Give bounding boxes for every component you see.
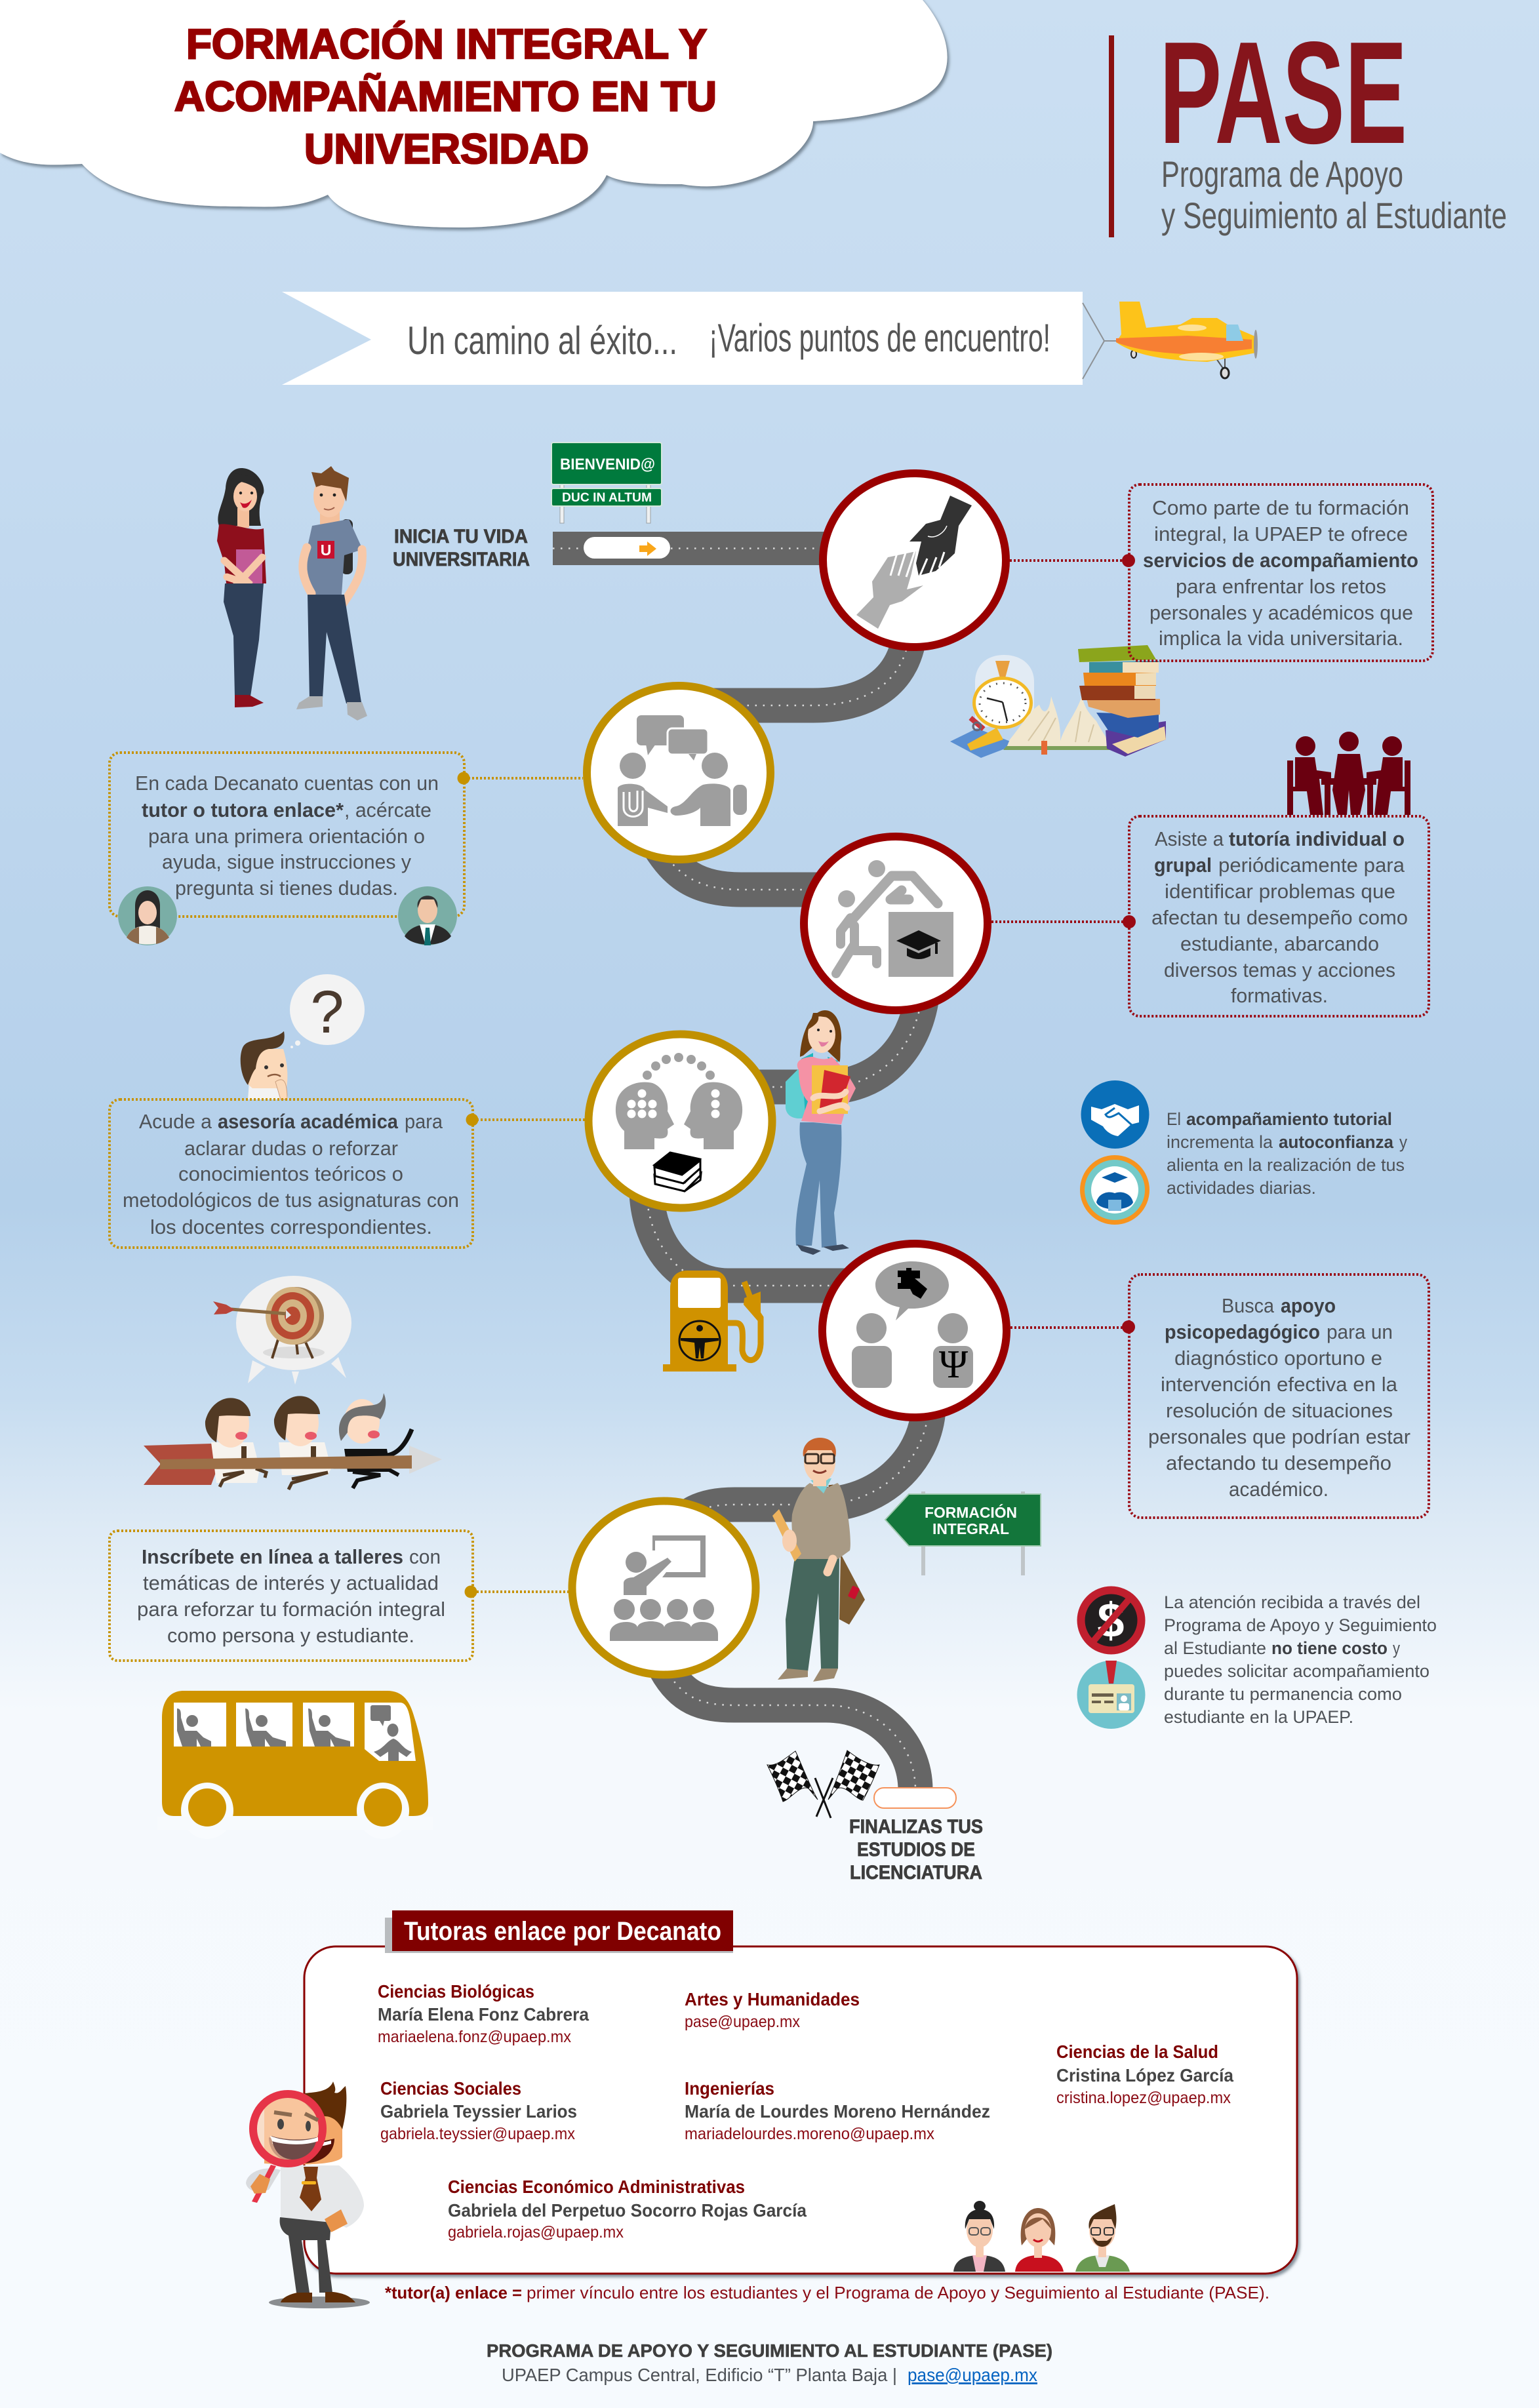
contact: ciencias biologicas: mariaelena.fonz@upaep.mx (378, 2028, 571, 2046)
illustration: male student with bag (772, 1438, 865, 1682)
heading: finalizas tus estudios: FINALIZAS TUS (849, 1816, 983, 1838)
person 3 (339, 1393, 412, 1488)
PASE logo (1109, 12, 1507, 237)
footer (487, 2340, 1052, 2385)
panel: apoyo psicopedagogico (1010, 1274, 1429, 1518)
heading: finalizas tus estudios (849, 1816, 983, 1884)
panel: apoyo psicopedagogico: diagnóstico oportuno e (1174, 1347, 1382, 1370)
person 2 (274, 1396, 331, 1490)
panel: tutoria individual o grupal: grupal (1154, 854, 1212, 877)
contact: ciencias biologicas: Ciencias Biológicas (378, 1981, 534, 2002)
icon: graduate (1080, 1155, 1149, 1225)
thought bubble: ? (310, 979, 344, 1046)
panel: apoyo psicopedagogico: afectando tu desempeño (1166, 1451, 1391, 1474)
icon: two people with psi: Ψ (939, 1343, 969, 1386)
panel: tutoria individual o grupal: formativas. (1231, 984, 1328, 1007)
footnote: *tutor(a) enlace = (385, 2283, 522, 2302)
contact: ingenierias: Ingenierías (685, 2078, 774, 2099)
footnote: primer vínculo entre los estudiantes y el Programa de Apoyo y Seguimiento al Estudiante (PASE). (527, 2283, 1269, 2302)
panel: tutor o tutora enlace: En cada Decanato cuentas con un (135, 772, 439, 795)
icon: teacher and audience (610, 1535, 718, 1641)
panel: servicios de acompañamiento: personales y académicos que (1149, 601, 1413, 624)
icon: no dollar: $ (1097, 1593, 1125, 1648)
panel: asesoria academica: aclarar dudas o reforzar (184, 1137, 398, 1160)
title (174, 20, 717, 172)
contact: ciencias sociales (380, 2078, 577, 2143)
icon: two people talking (618, 715, 747, 826)
cloud with title (0, 0, 948, 227)
panel: tutor o tutora enlace: tutor o tutora enlace* (142, 799, 344, 821)
book and hand (772, 1509, 801, 1562)
PASE logo: PASE (1159, 12, 1407, 174)
icon: handshake (1081, 1080, 1149, 1149)
panel: talleres (110, 1531, 569, 1661)
panel: apoyo psicopedagogico: académico. (1229, 1478, 1329, 1501)
icon: dark hand (909, 496, 972, 577)
side note: no tiene costo: no tiene costo (1271, 1638, 1388, 1658)
panel: asesoria academica: conocimientos teóricos o (178, 1162, 403, 1185)
illustration: thinking student (241, 974, 365, 1099)
legs (786, 1557, 839, 1672)
panel: tutor o tutora enlace: ayuda, sigue instrucciones y (162, 850, 411, 873)
side note: acompañamiento tutorial (1080, 1080, 1407, 1225)
illustration: three tutors (953, 2201, 1130, 2272)
side note: no tiene costo: y (1393, 1638, 1400, 1658)
arrow tail and head (144, 1444, 442, 1485)
illustration: target speech bubble (213, 1276, 351, 1385)
panel: servicios de acompañamiento: integral, la UPAEP te ofrece (1154, 523, 1408, 545)
footer: PROGRAMA DE APOYO Y SEGUIMIENTO AL ESTUDIANTE (PASE) (487, 2340, 1052, 2361)
arms and shirt (281, 2165, 364, 2228)
contact: ingenierias: mariadelourdes.moreno@upaep.mx (685, 2125, 934, 2143)
panel: tutoria individual o grupal (991, 816, 1429, 1016)
panel: talleres: con (409, 1545, 441, 1568)
icon: figures climbing to graduation (836, 860, 953, 977)
banner (282, 292, 1083, 385)
panel: tutoria individual o grupal: identificar problemas que (1165, 880, 1395, 903)
contact: ciencias de la salud (1056, 2042, 1233, 2107)
icon: airplane (1083, 302, 1258, 379)
sign: bienvenid@ (551, 443, 662, 523)
heading: inicia tu vida universitaria: INICIA TU VIDA (394, 526, 528, 547)
pants and shoes (280, 2217, 332, 2293)
banner: Un camino al éxito... (407, 319, 677, 363)
footer: pase@upaep.mx (908, 2365, 1037, 2385)
panel: apoyo psicopedagogico: Busca (1222, 1294, 1275, 1317)
tutor 2 (1015, 2208, 1064, 2272)
panel: asesoria academica: metodológicos de tus asignaturas con (123, 1189, 459, 1212)
side note: no tiene costo (1077, 1587, 1437, 1729)
panel: asesoria academica: los docentes correspondientes. (150, 1215, 432, 1238)
panel: talleres: para reforzar tu formación integral (137, 1598, 445, 1621)
person 1 (205, 1398, 266, 1487)
panel: tutor o tutora enlace (110, 753, 583, 945)
panel: tutor o tutora enlace: pregunta si tienes dudas. (175, 877, 398, 899)
panel: asesoria academica: para (405, 1110, 443, 1133)
circle 5: psychopedagogy (822, 1244, 1007, 1417)
sign: bienvenid@: BIENVENID@ (560, 456, 655, 473)
contact: ingenierias (685, 2078, 990, 2143)
panel: tutor o tutora enlace: para una primera orientación o (148, 825, 425, 848)
male student (296, 466, 367, 720)
bag (839, 1554, 865, 1625)
header tab (385, 1910, 733, 1953)
side note: acompañamiento tutorial: acompañamiento tutorial (1186, 1109, 1392, 1129)
title: ACOMPAÑAMIENTO EN TU (174, 73, 717, 120)
side note: no tiene costo: estudiante en la UPAEP. (1164, 1707, 1353, 1727)
contact: ciencias de la salud: Ciencias de la Salud (1056, 2042, 1218, 2062)
panel: apoyo psicopedagogico: psicopedagógico (1165, 1320, 1320, 1343)
panel: tutoria individual o grupal: Asiste a (1155, 827, 1224, 850)
panel: servicios de acompañamiento: servicios de acompañamiento (1143, 549, 1418, 572)
avatar: female tutor (118, 886, 177, 945)
heading: inicia tu vida universitaria (393, 526, 530, 570)
icon: speech bubble with puzzle (875, 1261, 949, 1320)
sweater (791, 1483, 850, 1559)
panel: apoyo psicopedagogico: apoyo (1281, 1294, 1336, 1317)
female student (217, 468, 266, 707)
avatar: male tutor (398, 886, 457, 945)
side note: no tiene costo: durante tu permanencia como (1164, 1684, 1402, 1704)
contact: ingenierias: María de Lourdes Moreno Hernández (685, 2101, 990, 2122)
side note: acompañamiento tutorial: El (1167, 1109, 1181, 1129)
icon: checkered flags (767, 1750, 879, 1818)
side note: acompañamiento tutorial: alienta en la realización de tus (1167, 1155, 1405, 1175)
clock under dome (972, 655, 1034, 729)
contact: ciencias de la salud: cristina.lopez@upaep.mx (1056, 2089, 1231, 2107)
contact: ciencias economico administrativas (448, 2177, 807, 2241)
panel: apoyo psicopedagogico: personales que podrían estar (1148, 1425, 1410, 1448)
contact: ciencias de la salud: Cristina López García (1056, 2065, 1233, 2085)
sign: bienvenid@: DUC IN ALTUM (562, 491, 652, 505)
panel: tutoria individual o grupal: diversos temas y acciones (1164, 958, 1395, 981)
book stack (1078, 645, 1166, 757)
emblem (679, 1321, 720, 1360)
panel: talleres: temáticas de interés y actualidad (143, 1571, 439, 1594)
illustration: books and clock (950, 645, 1166, 758)
panel: tutoria individual o grupal: estudiante, abarcando (1180, 932, 1379, 955)
panel: servicios de acompañamiento: para enfrentar los retos (1176, 575, 1386, 598)
panel: tutor o tutora enlace: , acércate (344, 799, 431, 821)
side note: acompañamiento tutorial: y (1399, 1132, 1407, 1152)
sign: formacion integral: FORMACIÓN (925, 1503, 1017, 1521)
icon: stack of books (654, 1153, 701, 1191)
thought bubble (290, 974, 365, 1048)
contact: artes y humanidades: pase@upaep.mx (685, 2013, 800, 2031)
male student: U (321, 542, 331, 559)
contact: ciencias biologicas: María Elena Fonz Cabrera (378, 2004, 589, 2024)
panel: tutoras enlace por decanato (304, 1910, 1297, 2274)
side note: no tiene costo: puedes solicitar acompañamiento (1164, 1661, 1429, 1681)
panel: tutoria individual o grupal: periódicamente para (1218, 854, 1405, 877)
title: FORMACIÓN INTEGRAL Y (186, 20, 707, 68)
side note: acompañamiento tutorial: autoconfianza (1279, 1132, 1394, 1152)
panel: asesoria academica: asesoría académica (218, 1110, 399, 1133)
banner: ¡Varios puntos de encuentro! (709, 316, 1050, 360)
illustration: two students (217, 466, 367, 720)
heading: inicia tu vida universitaria: UNIVERSITARIA (393, 549, 530, 570)
tutor 1 (953, 2201, 1005, 2272)
illustration: bus (157, 1691, 433, 1839)
contact: ciencias sociales: Gabriela Teyssier Larios (380, 2101, 577, 2122)
header tab: Tutoras enlace por Decanato (404, 1917, 721, 1946)
circle 4: academic advice (589, 1035, 772, 1208)
panel: talleres: Inscríbete en línea a talleres (142, 1545, 403, 1568)
tools on notebook (950, 718, 1017, 758)
panel: talleres: como persona y estudiante. (167, 1624, 414, 1647)
side note: no tiene costo: La atención recibida a través del (1164, 1592, 1420, 1612)
panel: servicios de acompañamiento: Como parte de tu formación (1152, 496, 1409, 519)
heading: finalizas tus estudios: ESTUDIOS DE (857, 1839, 975, 1861)
icon: gas pump (663, 1271, 761, 1372)
panel: asesoria academica (110, 1099, 585, 1248)
sign: formacion integral (885, 1491, 1041, 1575)
icon: no dollar (1077, 1587, 1145, 1655)
icon: two people with psi (852, 1313, 973, 1388)
side note: acompañamiento tutorial: incrementa la (1167, 1132, 1273, 1152)
panel: asesoria academica: Acude a (139, 1110, 212, 1133)
arrow shaft (160, 1455, 412, 1469)
wheels (157, 1783, 433, 1839)
backpack (786, 1062, 805, 1118)
circle 2: conversation (587, 686, 770, 859)
side note: no tiene costo: Programa de Apoyo y Seguimiento (1164, 1615, 1437, 1635)
circle 3: climbing tutoring (804, 837, 988, 1010)
road finish marker (874, 1788, 956, 1808)
magnifying glass (252, 2094, 323, 2203)
panel: apoyo psicopedagogico: para un (1327, 1320, 1393, 1343)
icon: light hand (856, 549, 923, 629)
icon: two heads (616, 1053, 742, 1149)
panel: tutoria individual o grupal: afectan tu desempeño como (1151, 906, 1408, 929)
contact: ciencias economico administrativas: Ciencias Económico Administrativas (448, 2177, 745, 2197)
icon: tutors table (1287, 732, 1410, 815)
illustration: man with magnifying glass (246, 2082, 370, 2308)
icon: id card (1077, 1661, 1145, 1729)
heading: finalizas tus estudios: LICENCIATURA (850, 1862, 982, 1884)
tie (300, 2167, 321, 2211)
contact: artes y humanidades (685, 1989, 860, 2031)
open book (1003, 696, 1115, 755)
side note: acompañamiento tutorial: actividades diarias. (1167, 1178, 1316, 1198)
panel: apoyo psicopedagogico: resolución de situaciones (1166, 1399, 1393, 1422)
head (264, 2098, 342, 2165)
panel: servicios de acompañamiento: implica la vida universitaria. (1159, 627, 1403, 650)
tutor 3 (1075, 2204, 1130, 2272)
contact: artes y humanidades: Artes y Humanidades (685, 1989, 860, 2009)
panel: apoyo psicopedagogico: intervención efectiva en la (1161, 1373, 1398, 1396)
circle 6: workshop (572, 1501, 755, 1674)
contact: ciencias biologicas (378, 1981, 589, 2046)
windows with passengers (174, 1703, 416, 1761)
road start marker (584, 537, 670, 559)
contact: ciencias sociales: gabriela.teyssier@upaep.mx (380, 2125, 575, 2143)
contact: ciencias economico administrativas: Gabriela del Perpetuo Socorro Rojas García (448, 2200, 807, 2220)
illustration: team riding arrow (144, 1393, 442, 1490)
panel: tutoria individual o grupal: tutoría individual o (1229, 827, 1405, 850)
PASE logo: Programa de Apoyo (1161, 153, 1403, 195)
contact: ciencias economico administrativas: gabriela.rojas@upaep.mx (448, 2223, 624, 2241)
footer: UPAEP Campus Central, Edificio “T” Planta Baja | (502, 2365, 897, 2385)
title: UNIVERSIDAD (304, 125, 589, 172)
panel: servicios de acompañamiento (1010, 484, 1433, 661)
side note: no tiene costo: al Estudiante (1164, 1638, 1266, 1658)
circle 1: hands (823, 473, 1006, 647)
sign: formacion integral: INTEGRAL (932, 1520, 1009, 1537)
road (553, 548, 929, 1790)
illustration: student with backpack and books (786, 1010, 856, 1255)
contact: ciencias sociales: Ciencias Sociales (380, 2078, 521, 2099)
